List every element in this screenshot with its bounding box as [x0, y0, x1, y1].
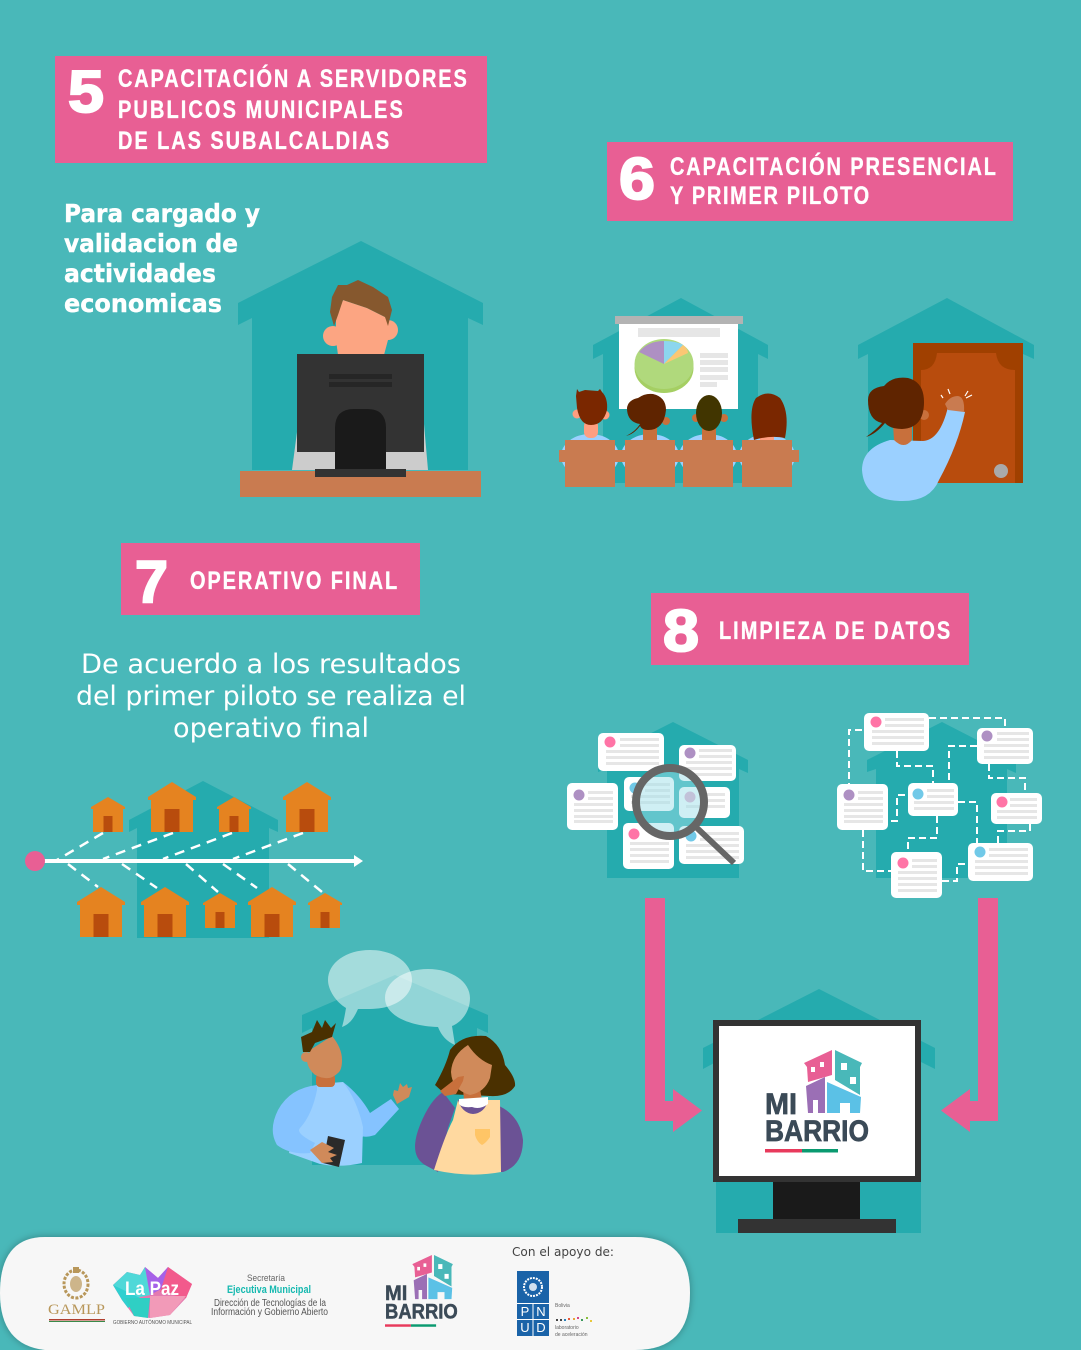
- logo: Mi Barrio small: [385, 1255, 458, 1327]
- illustration: person at computer: [238, 241, 483, 497]
- knocking person: [862, 378, 972, 501]
- section 7 description: [76, 649, 466, 744]
- heading text 5: CAPACITACIÓN A SERVIDORES: [118, 65, 467, 93]
- text: Secretaría Ejecutiva Municipal: [211, 1273, 328, 1318]
- section 7 heading: [121, 543, 420, 615]
- arrow: right pink elbow: [941, 898, 998, 1132]
- illustration: two people talking: [273, 950, 523, 1175]
- Mi Barrio logo: MI: [765, 1088, 797, 1121]
- text: Secretaría Ejecutiva Municipal: Información y Gobierno Abierto: [211, 1307, 328, 1318]
- section 6 heading: [607, 142, 1013, 221]
- section 5 description: [64, 199, 260, 318]
- illustration: person knocking on door: [858, 298, 1034, 501]
- footer panel: [0, 1237, 690, 1350]
- heading text 5: DE LAS SUBALCALDIAS: [118, 127, 389, 155]
- section 5 description: actividades: [64, 259, 216, 288]
- projection screen with pie chart: [615, 316, 743, 409]
- section 7 description: operativo final: [173, 713, 369, 744]
- logo: La Paz: GOBIERNO AUTÓNOMO MUNICIPAL: [113, 1319, 192, 1326]
- number 7: 7: [135, 549, 168, 615]
- heading text 7: OPERATIVO FINAL: [190, 567, 397, 595]
- arrow: left pink elbow: [645, 898, 702, 1132]
- logo: La Paz: La Paz: [125, 1279, 179, 1300]
- text: Con el apoyo de: Con el apoyo de:: [512, 1245, 614, 1259]
- logo: GAMLP: GAMLP: [48, 1302, 105, 1318]
- dashed connectors: [849, 718, 1030, 881]
- text: Secretaría Ejecutiva Municipal: Dirección de Tecnologías de la: [214, 1298, 326, 1309]
- heading text 6: [670, 153, 996, 210]
- section 5 heading: [55, 56, 487, 163]
- section 8 heading: [651, 593, 969, 665]
- text: Secretaría Ejecutiva Municipal: Secretaría: [247, 1273, 285, 1283]
- section 7 description: De acuerdo a los resultados: [81, 649, 461, 680]
- logo: Mi Barrio small: BARRIO: [385, 1301, 458, 1324]
- heading text 6: CAPACITACIÓN PRESENCIAL: [670, 153, 996, 181]
- illustration: monitor with Mi Barrio logo: [703, 989, 935, 1233]
- logo: Mi Barrio small: MI: [385, 1282, 407, 1305]
- number 6: 6: [619, 146, 655, 212]
- text: Secretaría Ejecutiva Municipal: Ejecutiva Municipal: [227, 1284, 311, 1296]
- Mi Barrio logo: BARRIO: [765, 1115, 869, 1148]
- door: [913, 343, 1023, 483]
- illustration: magnified records: [567, 722, 748, 878]
- logo: PNUD: [517, 1271, 549, 1336]
- network cards: [837, 713, 1042, 898]
- logo: PNUD: P: [521, 1304, 529, 1319]
- number 5: 5: [68, 59, 104, 125]
- section 5 description: Para cargado y: [64, 199, 260, 228]
- section 7 description: del primer piloto se realiza el: [76, 681, 466, 712]
- man with phone: [273, 1020, 412, 1167]
- text: laboratorio de aceleración: Bolivia: [555, 1303, 570, 1309]
- logo: PNUD: N: [536, 1304, 546, 1319]
- route arrow: [25, 851, 363, 871]
- logo: La Paz: [113, 1267, 192, 1326]
- heading text 6: Y PRIMER PILOTO: [670, 182, 869, 210]
- number 8: 8: [663, 598, 699, 664]
- illustration: presentation audience: [559, 298, 799, 487]
- logo: PNUD: D: [536, 1320, 546, 1335]
- logo: PNUD: U: [520, 1320, 530, 1335]
- woman thinking: [415, 1036, 523, 1175]
- heading text 5: PUBLICOS MUNICIPALES: [118, 96, 403, 124]
- heading text 5: [118, 65, 467, 155]
- Mi Barrio logo: [765, 1050, 869, 1152]
- section 5 description: validacion de: [64, 229, 238, 258]
- text: laboratorio de aceleración: laboratorio: [555, 1325, 579, 1331]
- magnifying glass: [636, 768, 734, 863]
- text: laboratorio de aceleración: de aceleración: [555, 1332, 588, 1338]
- text: laboratorio de aceleración: [555, 1303, 592, 1338]
- logo: GAMLP: [48, 1267, 105, 1322]
- heading text 8: LIMPIEZA DE DATOS: [719, 617, 950, 645]
- section 5 description: economicas: [64, 289, 222, 318]
- record cards: [567, 733, 744, 869]
- audience heads and chairs: [559, 389, 799, 487]
- illustration: connected records: [837, 713, 1042, 898]
- speech bubbles: [328, 950, 470, 1045]
- illustration: route map with houses: [25, 781, 363, 938]
